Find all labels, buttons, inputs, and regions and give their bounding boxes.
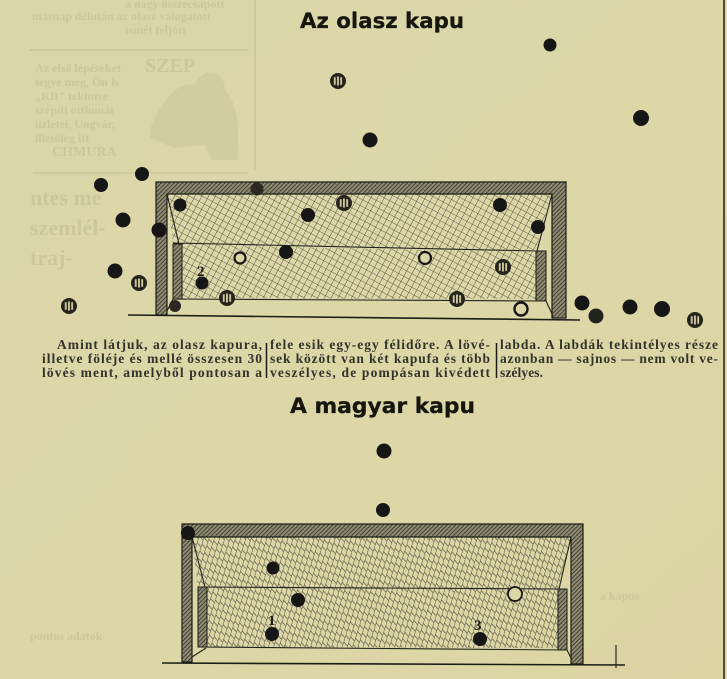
shots at Italian goal [61, 38, 703, 328]
net outline [167, 194, 553, 316]
faint bleed-through newsprint: ntes me [30, 185, 102, 210]
right column rule [723, 0, 725, 679]
column 1: Amint látjuk, az olasz kapura, [57, 337, 262, 352]
net: lower [207, 587, 558, 648]
faint bleed-through newsprint: üzletei, Ungvár, [35, 117, 115, 131]
faint bleed-through newsprint: „Kft" tekintse [35, 89, 109, 103]
faint bleed-through newsprint: pontos adatok [30, 629, 103, 643]
faint bleed-through newsprint: traj- [30, 245, 73, 270]
net outline [192, 537, 572, 660]
faint bleed-through newsprint: CHMURA [52, 145, 117, 160]
column 2 [270, 337, 490, 380]
title: Az olasz kapu: Az olasz kapu [300, 9, 464, 33]
column 1 [42, 337, 262, 380]
faint bleed-through newsprint: másnap délután az olasz válogatott [32, 9, 211, 23]
net: upper [192, 537, 571, 589]
diagram: Hungarian goal [162, 524, 625, 668]
faint bleed-through newsprint: Az első lépéseket [35, 61, 121, 75]
column 3 [500, 337, 718, 380]
faint bleed-through newsprint: szemlél- [30, 215, 106, 240]
ground [128, 315, 580, 320]
column 2: veszélyes, de pompásan kivédett [270, 365, 490, 380]
goal frame [156, 182, 566, 318]
title: A magyar kapu: A magyar kapu [290, 394, 475, 418]
back posts [198, 587, 567, 650]
faint bleed-through newsprint: illetőleg itt [35, 131, 89, 145]
column 3: szélyes. [500, 365, 543, 380]
diagram: Italian goal [128, 182, 580, 320]
column 1: lövés ment, amelyből pontosan a [42, 365, 262, 380]
faint bleed-through newsprint [30, 0, 640, 643]
shots at Hungarian goal [181, 444, 522, 646]
back posts [173, 244, 546, 301]
faint bleed-through newsprint: tegye meg, Ön is [35, 75, 119, 89]
shots at Hungarian goal: 3 [474, 618, 482, 634]
shots at Hungarian goal: 1 [268, 613, 276, 629]
net: upper [167, 194, 551, 250]
ground [162, 663, 625, 665]
faint bleed-through newsprint: a kapus [600, 589, 640, 603]
faint bleed-through newsprint: szépíti otthonát [35, 103, 114, 117]
column 2: sek között van két kapufa és több [270, 351, 490, 366]
caption text [42, 337, 718, 380]
net: lower [182, 245, 536, 299]
column 2: fele esik egy-egy félidőre. A lövé- [270, 337, 490, 352]
column 1: illetve föléje és mellé összesen 30 [42, 351, 262, 366]
goal frame [182, 524, 583, 664]
faint bleed-through newsprint: ismét feljött [125, 23, 186, 37]
column 3: azonban — sajnos — nem volt ve- [500, 351, 718, 366]
faint bleed-through newsprint: SZEP [145, 55, 195, 77]
shots at Italian goal: 2 [197, 264, 204, 280]
column 3: labda. A labdák tekintélyes része [500, 337, 718, 352]
